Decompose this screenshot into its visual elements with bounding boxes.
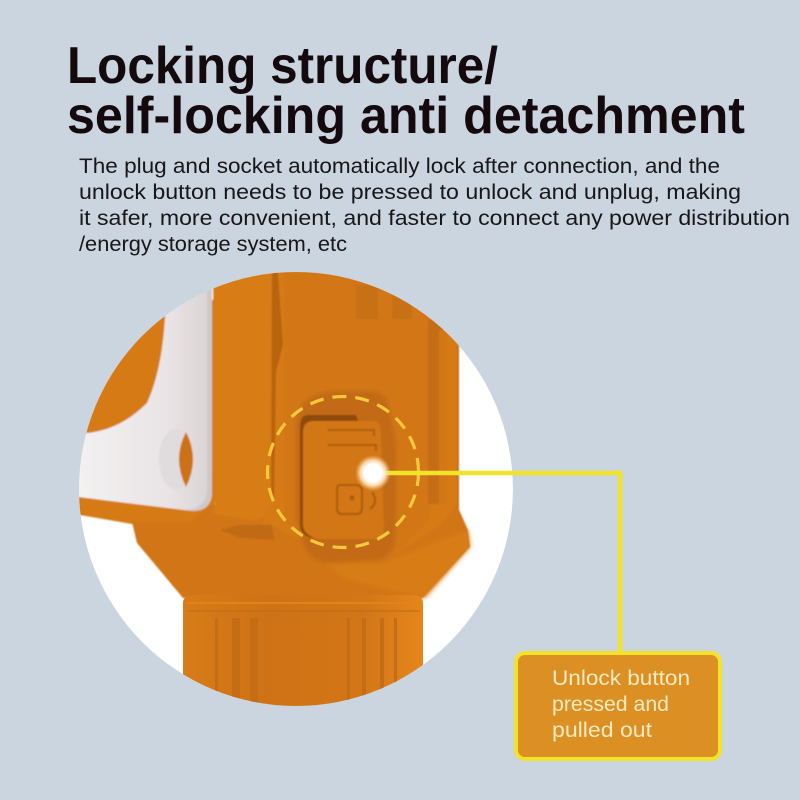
- white mounting plate: [79, 291, 214, 512]
- button icon dot: [350, 496, 354, 500]
- callout text: pulled out: [552, 718, 652, 742]
- button lock icon: [337, 485, 375, 514]
- shadow under flange: [220, 525, 274, 540]
- lower hexagonal body: [132, 505, 470, 598]
- dashed highlight ring: [268, 396, 418, 548]
- dark seam: [271, 260, 283, 500]
- description text: unlock button needs to be pressed to unlock and unplug, making: [79, 181, 741, 204]
- title: [67, 37, 745, 145]
- right vertical ribs: [428, 320, 459, 510]
- central darker panel: [300, 526, 375, 563]
- glowing dot: [355, 455, 391, 491]
- housing lighter left band: [212, 260, 272, 521]
- button grip lines: [328, 430, 376, 451]
- callout box: [516, 653, 720, 759]
- title: Locking structure/: [67, 37, 498, 95]
- description text: [79, 155, 790, 256]
- white circle backdrop: [80, 288, 513, 674]
- main housing: [268, 272, 458, 506]
- description text: The plug and socket automatically lock after connection, and the: [79, 155, 720, 178]
- button recess: [296, 391, 396, 563]
- leader line: [373, 473, 620, 654]
- lighter shading on lower body: [300, 530, 470, 598]
- mounting hole: [159, 429, 193, 489]
- unlock button: [300, 415, 384, 539]
- product photo circle: [79, 272, 513, 674]
- grey plate edge: [188, 290, 213, 512]
- callout text: pressed and: [552, 692, 669, 716]
- description text: it safer, more convenient, and faster to connect any power distribution: [79, 207, 790, 230]
- description text: /energy storage system, etc: [79, 233, 347, 256]
- title: self-locking anti detachment: [67, 87, 745, 145]
- top ribs: [356, 285, 412, 319]
- callout text: Unlock button: [552, 666, 690, 690]
- callout text: [552, 666, 690, 742]
- orange left flange behind plate: [70, 300, 266, 524]
- threaded nut: [183, 595, 423, 706]
